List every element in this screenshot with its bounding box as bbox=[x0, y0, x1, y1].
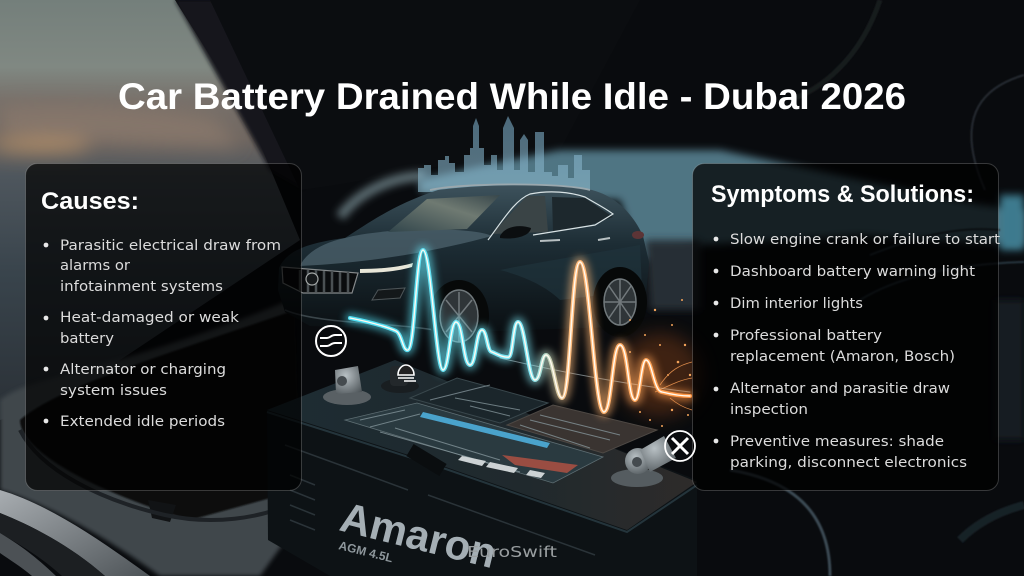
symptoms list: Alternator and parasitie draw bbox=[730, 380, 950, 397]
car bbox=[278, 184, 649, 352]
causes list: Extended idle periods bbox=[60, 413, 225, 430]
panel: symptoms and solutions bbox=[692, 164, 1000, 490]
heading: symptoms and solutions: Symptoms & Solutions: bbox=[711, 181, 974, 208]
grille bbox=[282, 267, 358, 293]
battery: AGM 4.5L bbox=[337, 538, 394, 565]
panel: causes bbox=[26, 164, 302, 490]
symptoms list: Dashboard battery warning light bbox=[730, 263, 975, 280]
symptoms list: inspection bbox=[730, 401, 808, 418]
icon: disconnected circle bbox=[665, 431, 695, 461]
title: Car Battery Drained While Idle - Dubai 2026 bbox=[118, 76, 906, 117]
symptoms list: Dim interior lights bbox=[730, 295, 863, 312]
symptoms list: Preventive measures: shade bbox=[730, 433, 944, 450]
causes list: alarms or bbox=[60, 257, 130, 274]
causes list: infotainment systems bbox=[60, 278, 223, 295]
city skyline hologram bbox=[418, 116, 590, 192]
causes list: Parasitic electrical draw from bbox=[60, 237, 281, 254]
icon: alternating current circle bbox=[316, 326, 346, 356]
windshield bbox=[388, 195, 500, 232]
headlight bbox=[360, 263, 413, 273]
symptoms list: replacement (Amaron, Bosch) bbox=[730, 348, 955, 365]
battery brand text: Amaron bbox=[336, 493, 501, 576]
causes list bbox=[44, 237, 281, 430]
causes list: Alternator or charging bbox=[60, 361, 226, 378]
battery sticker panels bbox=[345, 378, 657, 483]
causes list: Heat-damaged or weak bbox=[60, 309, 240, 326]
battery bbox=[267, 360, 697, 576]
causes list: battery bbox=[60, 330, 114, 347]
wheels bbox=[429, 267, 647, 352]
mirror bbox=[500, 226, 531, 239]
battery terminals bbox=[323, 366, 676, 487]
icon: bell warning bbox=[398, 365, 416, 381]
causes list: system issues bbox=[60, 382, 167, 399]
ECG waveform bbox=[350, 250, 690, 412]
symptoms list: Slow engine crank or failure to start bbox=[730, 231, 1000, 248]
watermark: EuroSwift bbox=[467, 543, 557, 561]
symptoms list: Professional battery bbox=[730, 327, 882, 344]
heading: causes: Causes: bbox=[41, 188, 139, 215]
symptoms list: parking, disconnect electronics bbox=[730, 454, 967, 471]
side windows bbox=[492, 196, 613, 234]
sparks bbox=[618, 299, 702, 427]
symptoms list bbox=[714, 231, 1000, 471]
